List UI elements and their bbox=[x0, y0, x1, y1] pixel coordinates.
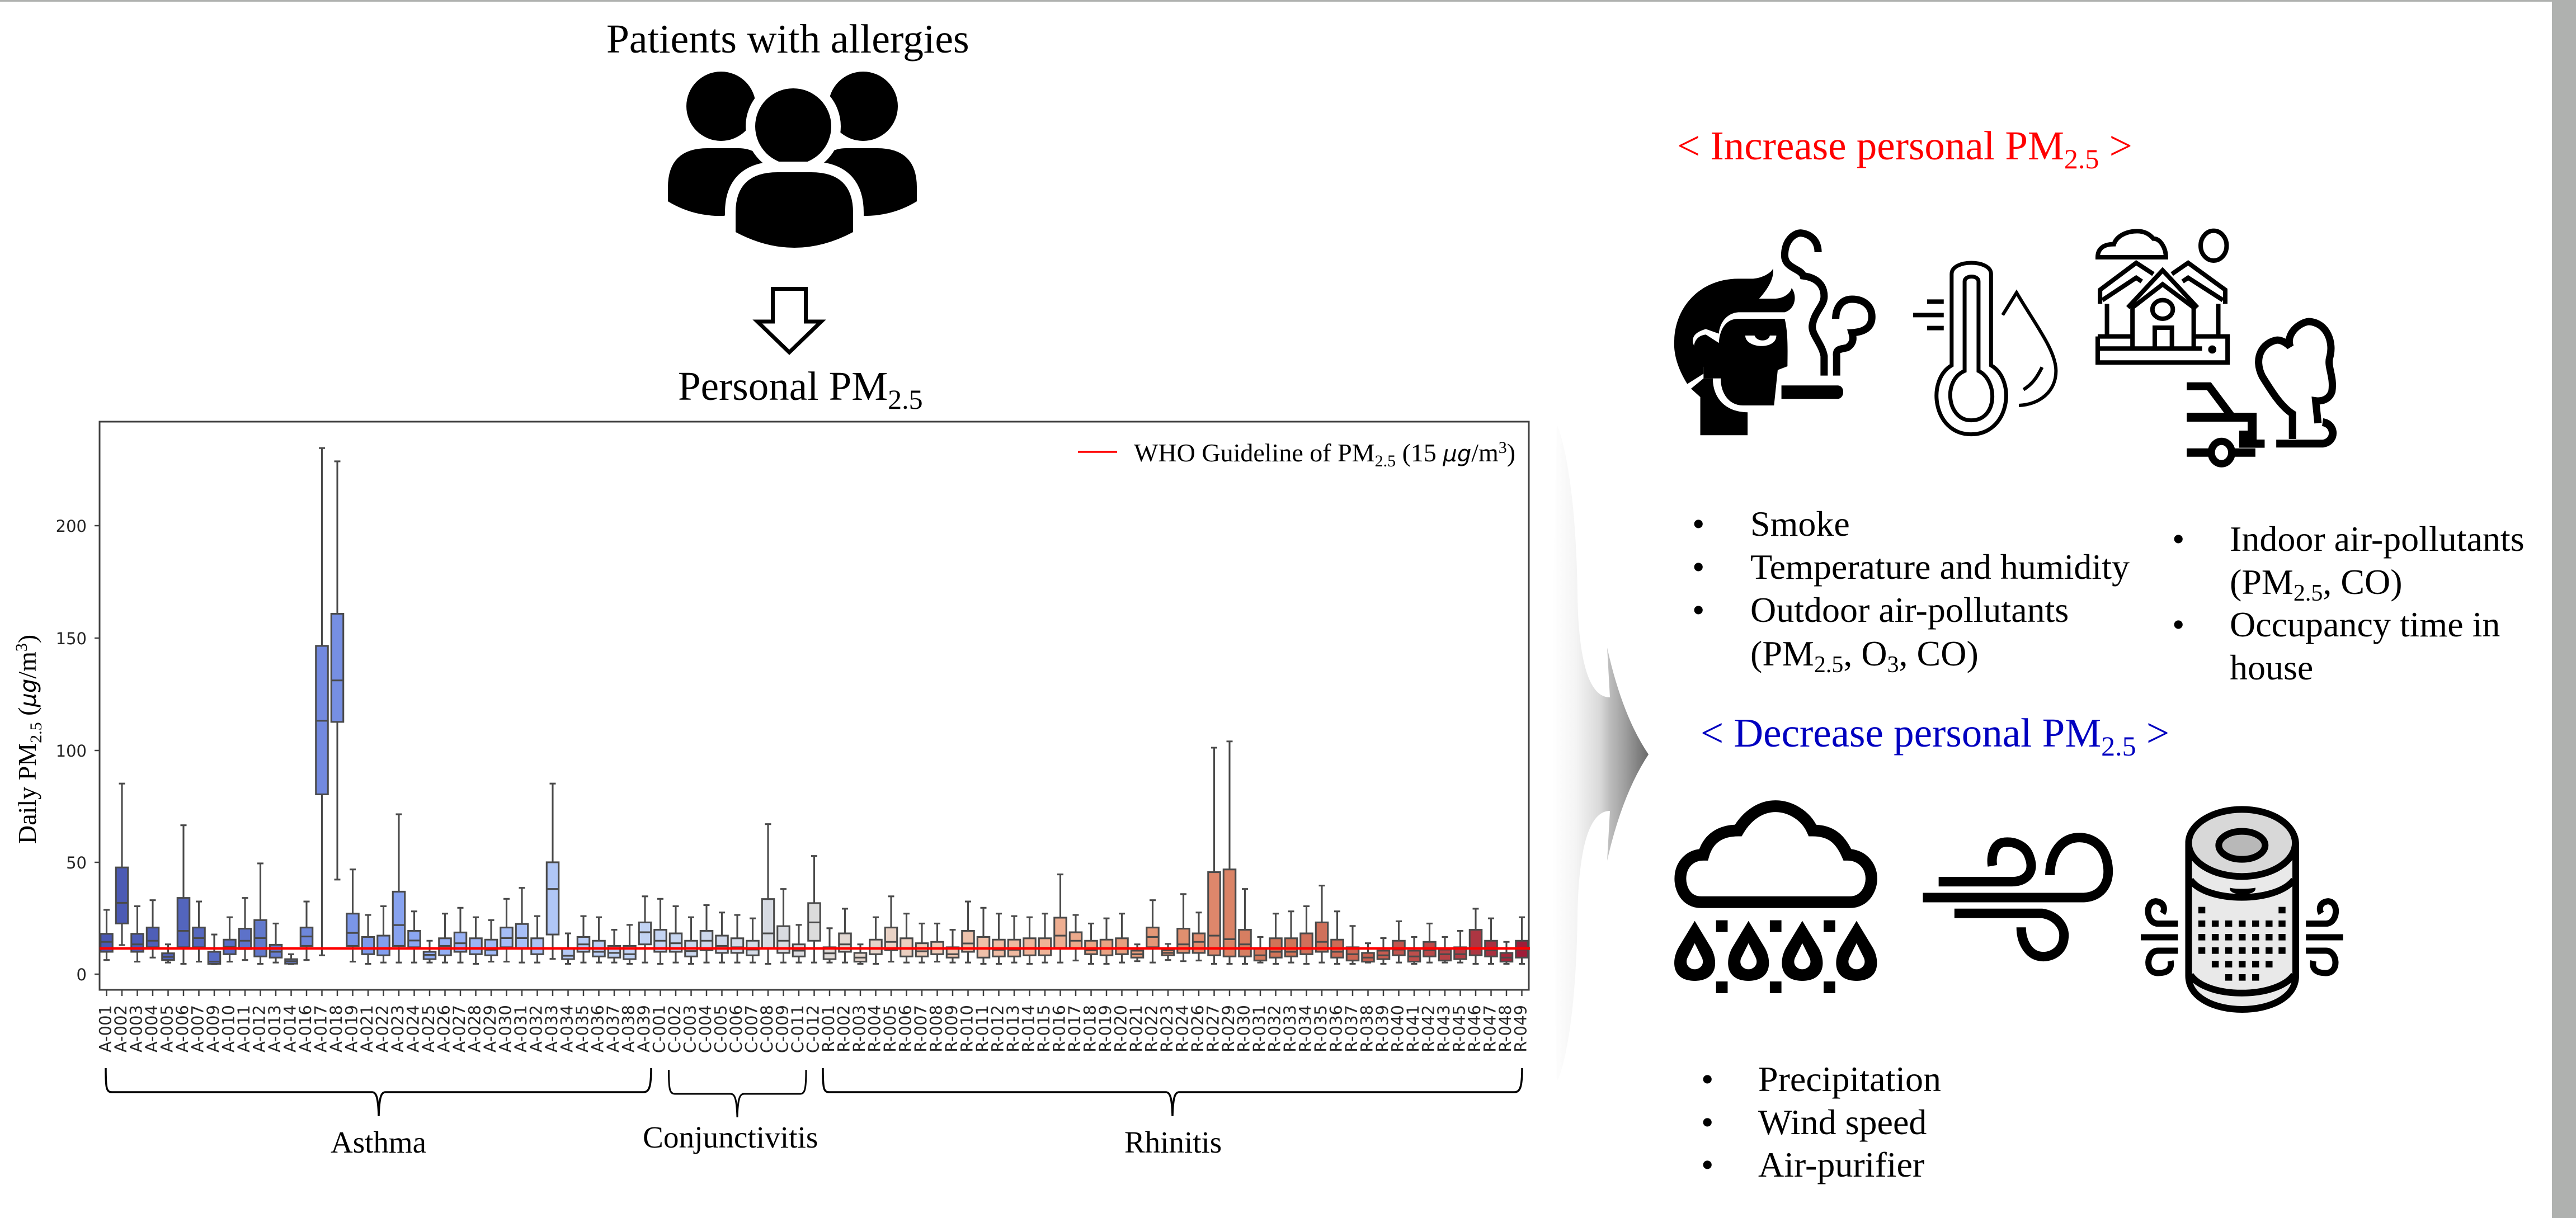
x-axis patient labels: A-014 bbox=[281, 1005, 300, 1052]
x-axis patient labels: A-034 bbox=[557, 1005, 576, 1052]
x-axis patient labels: A-024 bbox=[404, 1005, 423, 1052]
x-axis patient labels: A-025 bbox=[419, 1005, 438, 1052]
x-axis patient labels: R-035 bbox=[1311, 1005, 1330, 1052]
icon: group of patients bbox=[668, 72, 917, 248]
x-axis patient labels: R-040 bbox=[1388, 1005, 1407, 1052]
list: decreasing factors: Wind speed bbox=[1758, 1102, 1927, 1142]
x-axis patient labels: R-002 bbox=[835, 1005, 854, 1052]
y-axis ticks and labels: 0 bbox=[77, 965, 87, 984]
x-axis patient labels: A-016 bbox=[296, 1005, 315, 1052]
icon: thermometer and humidity drop bbox=[1913, 263, 2056, 435]
bracket and label: asthma bbox=[106, 1068, 651, 1159]
list: increasing factors right: • bbox=[2172, 605, 2184, 644]
title: patients with allergies: Patients with allergies bbox=[606, 16, 969, 62]
list: increasing factors left: , CO) bbox=[1899, 634, 1979, 673]
boxes: conjunctivitis bbox=[654, 824, 820, 964]
box plots: all patients bbox=[101, 448, 1528, 964]
x-axis patient labels: A-026 bbox=[434, 1005, 453, 1052]
x-axis patient labels: A-004 bbox=[142, 1005, 161, 1052]
heading: decrease personal PM2.5: 2.5 bbox=[2101, 730, 2136, 762]
x-axis patient labels: R-017 bbox=[1065, 1005, 1084, 1052]
x-axis patient labels: A-001 bbox=[96, 1005, 115, 1052]
icon: car and tree bbox=[2187, 322, 2333, 464]
x-axis patient labels bbox=[96, 1005, 1530, 1053]
x-axis patient labels: R-006 bbox=[896, 1005, 915, 1052]
x-axis patient labels: R-027 bbox=[1204, 1005, 1223, 1052]
list: increasing factors left bbox=[1692, 504, 2130, 678]
x-axis patient labels: A-030 bbox=[496, 1005, 515, 1052]
bracket and label: rhinitis: Rhinitis bbox=[1124, 1125, 1222, 1159]
list: decreasing factors: • bbox=[1701, 1145, 1713, 1184]
chart: daily PM2.5 box plot bbox=[12, 422, 1530, 1053]
x-axis patient labels: R-037 bbox=[1342, 1005, 1361, 1052]
x-axis patient labels: A-017 bbox=[311, 1005, 330, 1052]
arrow: gradient pointing to factors bbox=[1550, 424, 1649, 1082]
y-axis title: 2.5 bbox=[27, 722, 45, 743]
x-axis patient labels: R-008 bbox=[926, 1005, 945, 1052]
x-axis patient labels: A-038 bbox=[619, 1005, 638, 1052]
legend: WHO guideline: 3 bbox=[1499, 438, 1507, 457]
icon: rain cloud bbox=[1674, 806, 1877, 993]
list: increasing factors right: (PM bbox=[2230, 562, 2294, 602]
x-axis patient labels: R-021 bbox=[1127, 1005, 1146, 1052]
x-axis patient labels: A-033 bbox=[542, 1005, 561, 1052]
heading: increase personal PM2.5: < Increase personal PM bbox=[1677, 123, 2064, 168]
list: increasing factors right: • bbox=[2172, 519, 2184, 559]
y-axis ticks and labels: 50 bbox=[66, 853, 87, 872]
list: increasing factors left: Outdoor air-pollutants bbox=[1750, 590, 2069, 630]
x-axis patient labels: R-048 bbox=[1496, 1005, 1515, 1052]
icon: house with cloud and sun bbox=[2098, 231, 2227, 362]
x-axis patient labels: R-005 bbox=[880, 1005, 900, 1052]
x-axis patient labels: A-010 bbox=[219, 1005, 238, 1052]
list: decreasing factors: Precipitation bbox=[1758, 1059, 1941, 1099]
y-axis ticks and labels: 150 bbox=[56, 629, 87, 648]
y-axis ticks and labels: 100 bbox=[56, 742, 87, 761]
x-axis patient labels: R-013 bbox=[1004, 1005, 1023, 1052]
x-axis patient labels: C-009 bbox=[773, 1005, 792, 1053]
x-axis patient labels: C-011 bbox=[788, 1005, 807, 1053]
x-axis patient labels: A-009 bbox=[204, 1005, 223, 1052]
x-axis patient labels: R-049 bbox=[1511, 1005, 1530, 1052]
x-axis patient labels: R-029 bbox=[1219, 1005, 1238, 1052]
list: increasing factors left: (PM bbox=[1750, 634, 1814, 673]
heading: decrease personal PM2.5: < Decrease personal PM bbox=[1701, 710, 2101, 756]
x-axis patient labels: R-042 bbox=[1419, 1005, 1438, 1052]
x-axis patient labels: A-005 bbox=[158, 1005, 177, 1052]
x-axis patient labels: R-007 bbox=[911, 1005, 930, 1052]
list: decreasing factors bbox=[1701, 1059, 1941, 1184]
list: increasing factors right: 2.5 bbox=[2294, 580, 2323, 606]
y-axis ticks and labels: 200 bbox=[56, 517, 87, 536]
heading: increase personal PM2.5: > bbox=[2099, 123, 2132, 168]
x-axis patient labels: R-030 bbox=[1234, 1005, 1253, 1052]
x-axis patient labels: R-047 bbox=[1480, 1005, 1499, 1052]
x-axis patient labels: A-036 bbox=[588, 1005, 607, 1052]
x-axis patient labels: A-027 bbox=[450, 1005, 469, 1052]
x-axis patient labels: R-024 bbox=[1172, 1005, 1192, 1052]
legend: WHO guideline: 2.5 bbox=[1375, 452, 1396, 470]
x-axis patient labels: A-006 bbox=[173, 1005, 192, 1052]
x-axis patient labels: R-003 bbox=[850, 1005, 869, 1052]
y-axis title: 3 bbox=[12, 643, 31, 652]
x-axis patient labels: A-028 bbox=[465, 1005, 484, 1052]
x-axis patient labels: R-026 bbox=[1188, 1005, 1207, 1052]
x-axis patient labels: A-021 bbox=[357, 1005, 376, 1052]
x-axis patient labels: A-011 bbox=[234, 1005, 253, 1052]
x-axis patient labels: R-020 bbox=[1111, 1005, 1130, 1052]
x-axis patient labels: C-006 bbox=[727, 1005, 746, 1053]
y-axis title: Daily PM bbox=[13, 743, 41, 844]
x-axis patient labels: R-012 bbox=[988, 1005, 1007, 1052]
legend: WHO guideline: (15 bbox=[1396, 438, 1443, 467]
x-axis patient labels: R-010 bbox=[958, 1005, 977, 1052]
x-axis patient labels: C-001 bbox=[650, 1005, 669, 1053]
x-axis patient labels: R-032 bbox=[1265, 1005, 1284, 1052]
x-axis patient labels: R-034 bbox=[1296, 1005, 1315, 1052]
x-axis patient labels: A-031 bbox=[511, 1005, 530, 1052]
list: increasing factors left: Temperature and humidity bbox=[1750, 547, 2130, 587]
x-axis patient labels: R-023 bbox=[1157, 1005, 1176, 1052]
list: increasing factors left: • bbox=[1692, 547, 1704, 587]
x-axis patient labels: R-045 bbox=[1450, 1005, 1469, 1052]
list: decreasing factors: • bbox=[1701, 1059, 1713, 1099]
bracket and label: conjunctivitis bbox=[643, 1070, 818, 1154]
x-axis patient labels: R-016 bbox=[1049, 1005, 1068, 1052]
icon: air purifier bbox=[2141, 809, 2343, 1009]
x-axis patient labels: R-031 bbox=[1250, 1005, 1269, 1052]
x-axis patient labels: R-018 bbox=[1081, 1005, 1100, 1052]
x-axis patient labels: A-003 bbox=[126, 1005, 145, 1052]
x-axis patient labels: R-041 bbox=[1404, 1005, 1423, 1052]
list: increasing factors left: • bbox=[1692, 590, 1704, 630]
list: increasing factors right: house bbox=[2230, 648, 2313, 687]
bracket and label: asthma: Asthma bbox=[331, 1125, 426, 1159]
x-axis patient labels: C-012 bbox=[803, 1005, 822, 1053]
x-axis patient labels: R-019 bbox=[1096, 1005, 1115, 1052]
y-axis ticks and labels bbox=[56, 517, 100, 984]
x-axis patient labels: A-019 bbox=[342, 1005, 361, 1052]
list: increasing factors left: , O bbox=[1843, 634, 1887, 673]
heading: personal PM2.5: Personal PM bbox=[678, 363, 888, 409]
bracket and label: rhinitis bbox=[823, 1068, 1522, 1159]
x-axis patient labels: R-036 bbox=[1327, 1005, 1346, 1052]
x-axis patient labels: C-007 bbox=[742, 1005, 761, 1053]
list: increasing factors left: 2.5 bbox=[1814, 652, 1843, 678]
list: decreasing factors: • bbox=[1701, 1102, 1713, 1142]
legend: WHO guideline: μg/m bbox=[1443, 438, 1499, 467]
x-axis patient labels: R-033 bbox=[1280, 1005, 1299, 1052]
y-axis title: μg/m bbox=[13, 652, 41, 707]
x-axis patient labels: R-015 bbox=[1034, 1005, 1053, 1052]
y-axis title: ) bbox=[13, 635, 41, 643]
x-axis patient labels: R-001 bbox=[819, 1005, 838, 1052]
bracket and label: conjunctivitis: Conjunctivitis bbox=[643, 1120, 818, 1154]
x-axis patient labels: A-022 bbox=[373, 1005, 392, 1052]
boxes: asthma bbox=[101, 448, 651, 964]
list: increasing factors right: , CO) bbox=[2323, 562, 2403, 602]
x-axis patient labels: A-018 bbox=[327, 1005, 346, 1052]
icon: smoker bbox=[1674, 233, 1872, 435]
x-axis patient labels: A-037 bbox=[604, 1005, 623, 1052]
heading: increase personal PM2.5: 2.5 bbox=[2064, 143, 2099, 174]
x-axis patient labels: R-039 bbox=[1373, 1005, 1392, 1052]
list: increasing factors right: Indoor air-pollutants bbox=[2230, 519, 2525, 559]
legend: WHO guideline bbox=[1078, 438, 1515, 470]
x-axis patient labels: R-004 bbox=[865, 1005, 884, 1052]
list: increasing factors left: • bbox=[1692, 504, 1704, 544]
x-axis patient labels: C-005 bbox=[712, 1005, 731, 1053]
x-axis patient labels: C-003 bbox=[680, 1005, 699, 1053]
x-axis patient labels: A-007 bbox=[188, 1005, 207, 1052]
x-axis patient labels: A-002 bbox=[111, 1005, 130, 1052]
x-axis patient labels: A-035 bbox=[573, 1005, 592, 1052]
list: increasing factors left: Smoke bbox=[1750, 504, 1850, 544]
arrow: patients to personal PM2.5 bbox=[757, 289, 821, 352]
x-axis patient labels: A-012 bbox=[249, 1005, 269, 1052]
boxes: rhinitis bbox=[823, 742, 1528, 964]
x-axis patient labels: R-022 bbox=[1142, 1005, 1161, 1052]
x-axis patient labels: A-032 bbox=[527, 1005, 546, 1052]
x-axis tick marks bbox=[106, 990, 1522, 996]
list: decreasing factors: Air-purifier bbox=[1758, 1145, 1924, 1184]
x-axis patient labels: R-011 bbox=[973, 1005, 992, 1052]
list: increasing factors right: Occupancy time in bbox=[2230, 605, 2500, 644]
list: increasing factors right bbox=[2172, 519, 2525, 687]
x-axis patient labels: A-013 bbox=[265, 1005, 284, 1052]
x-axis patient labels: C-004 bbox=[696, 1005, 715, 1053]
x-axis patient labels: A-023 bbox=[388, 1005, 407, 1052]
WHO guideline reference line bbox=[100, 947, 1530, 950]
heading: personal PM2.5: 2.5 bbox=[888, 384, 923, 415]
x-axis patient labels: R-043 bbox=[1434, 1005, 1453, 1052]
x-axis patient labels: C-008 bbox=[757, 1005, 776, 1053]
x-axis patient labels: R-046 bbox=[1465, 1005, 1484, 1052]
y-axis title: ( bbox=[13, 707, 41, 722]
icon: wind bbox=[1923, 838, 2108, 957]
x-axis patient labels: C-002 bbox=[665, 1005, 684, 1053]
x-axis patient labels: A-039 bbox=[634, 1005, 653, 1052]
x-axis patient labels: R-009 bbox=[942, 1005, 961, 1052]
legend: WHO guideline: WHO Guideline of PM bbox=[1134, 438, 1375, 467]
x-axis patient labels: A-029 bbox=[481, 1005, 500, 1052]
legend: WHO guideline: ) bbox=[1507, 438, 1515, 467]
x-axis patient labels: R-038 bbox=[1357, 1005, 1376, 1052]
list: increasing factors left: 3 bbox=[1887, 652, 1899, 678]
x-axis patient labels: R-014 bbox=[1019, 1005, 1038, 1052]
heading: decrease personal PM2.5: > bbox=[2136, 710, 2169, 756]
